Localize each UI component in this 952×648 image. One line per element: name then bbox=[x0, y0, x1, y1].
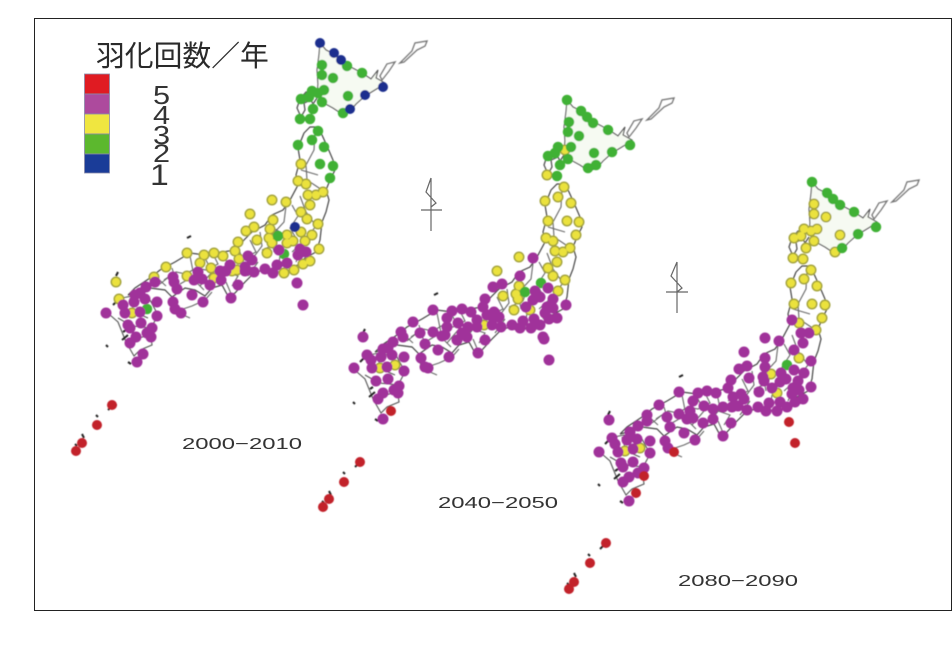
north arrow: map 1 bbox=[421, 178, 442, 231]
dots: 3 generations (yellow) bbox=[116, 164, 323, 313]
dots: 1 generation (blue) bbox=[295, 43, 383, 227]
north arrow: map 3 bbox=[666, 262, 688, 313]
dots: 2 generations (green) bbox=[787, 182, 876, 365]
dots: 5 generations (red) bbox=[323, 411, 391, 507]
dots: 3 generations (yellow) bbox=[380, 150, 579, 368]
dots: 5 generations (red) bbox=[76, 405, 112, 451]
dots: 5 generations (red) bbox=[569, 422, 795, 589]
dots: 4 generations (purple) bbox=[599, 320, 811, 501]
legend: numeric labels: 4 bbox=[153, 101, 170, 130]
legend title: 羽化回数／年 bbox=[96, 41, 269, 73]
legend: numeric labels: 3 bbox=[153, 121, 170, 150]
map: 2000-2010 bbox=[75, 41, 427, 451]
legend: numeric labels bbox=[150, 81, 170, 192]
period label: 2040-2050: 2040−2050 bbox=[438, 495, 558, 512]
map: 2080-2090 bbox=[567, 180, 919, 589]
legend: numeric labels: 2 bbox=[153, 140, 170, 167]
dots: 2 generations (green) bbox=[525, 100, 630, 292]
legend: numeric labels: 1 bbox=[150, 158, 169, 192]
dots: 2 generations (green) bbox=[147, 65, 362, 309]
legend: numeric labels: 5 bbox=[153, 81, 170, 110]
period label: 2080-2090: 2080−2090 bbox=[678, 573, 798, 590]
map: 2040-2050 bbox=[322, 98, 674, 507]
legend: colour swatches bbox=[84, 74, 110, 173]
dots: 3 generations (yellow) bbox=[625, 204, 840, 451]
dots: 4 generations (purple) bbox=[354, 258, 566, 419]
dots: 4 generations (purple) bbox=[106, 249, 306, 362]
period label: 2000-2010: 2000−2010 bbox=[182, 436, 302, 453]
